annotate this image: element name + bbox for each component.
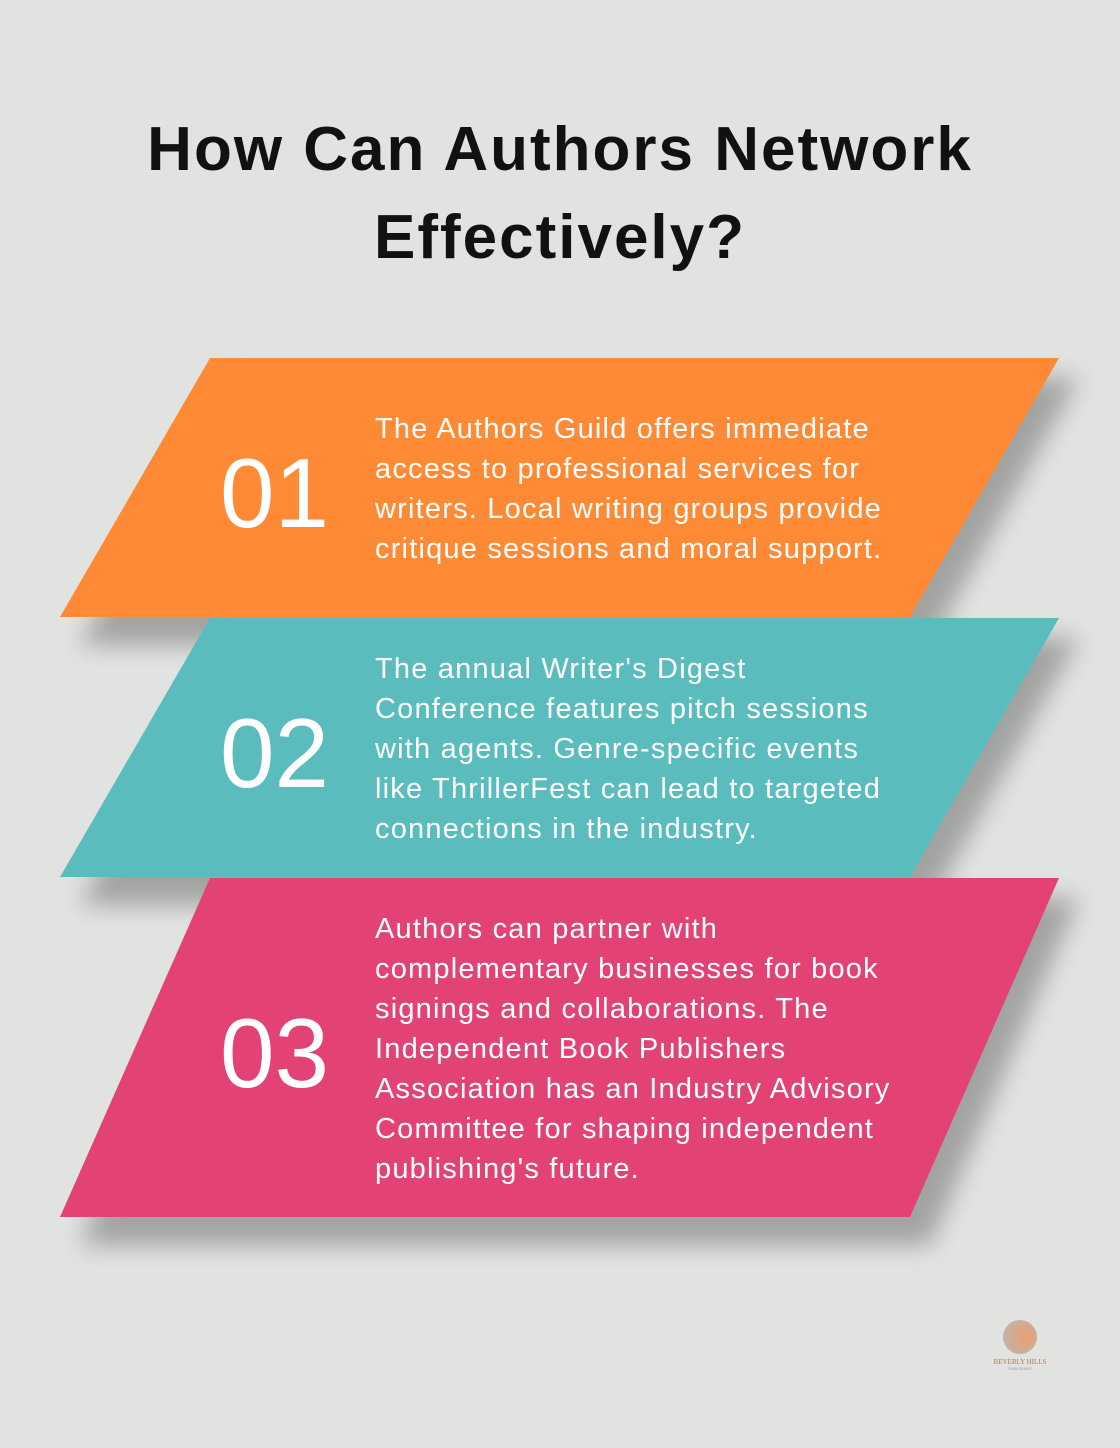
title: Effectively? [374, 203, 746, 272]
text 01: writers. Local writing groups provide [375, 493, 882, 525]
text 02: The annual Writer's Digest [375, 653, 746, 685]
text 03: Authors can partner with [375, 913, 718, 945]
text 03: complementary businesses for book [375, 953, 879, 985]
text 01: access to professional services for [375, 453, 860, 485]
logo: BEVERLY HILLS [994, 1358, 1046, 1366]
logo [994, 1320, 1046, 1371]
text 02: like ThrillerFest can lead to targeted [375, 773, 881, 805]
panel 3 [60, 878, 1059, 1217]
panel 2 [60, 618, 1059, 877]
text 03: Association has an Industry Advisory [375, 1073, 890, 1105]
text 02 [375, 653, 881, 845]
text 03: Committee for shaping independent [375, 1113, 874, 1145]
title [147, 115, 973, 272]
text 01: critique sessions and moral support. [375, 533, 882, 565]
number 03: 03 [220, 998, 329, 1108]
panel 1 [60, 358, 1059, 617]
text 01: The Authors Guild offers immediate [375, 413, 870, 445]
text 01 [375, 413, 882, 565]
text 02: Conference features pitch sessions [375, 693, 869, 725]
text 03: signings and collaborations. The [375, 993, 829, 1025]
text 02: with agents. Genre-specific events [375, 733, 859, 765]
text 03 [375, 913, 890, 1185]
number 01: 01 [220, 438, 329, 548]
logo: PUBLISHING [1008, 1366, 1032, 1371]
text 02: connections in the industry. [375, 813, 758, 845]
text 03: Independent Book Publishers [375, 1033, 786, 1065]
text 03: publishing's future. [375, 1153, 640, 1185]
number 02: 02 [220, 698, 329, 808]
title: How Can Authors Network [147, 115, 973, 184]
